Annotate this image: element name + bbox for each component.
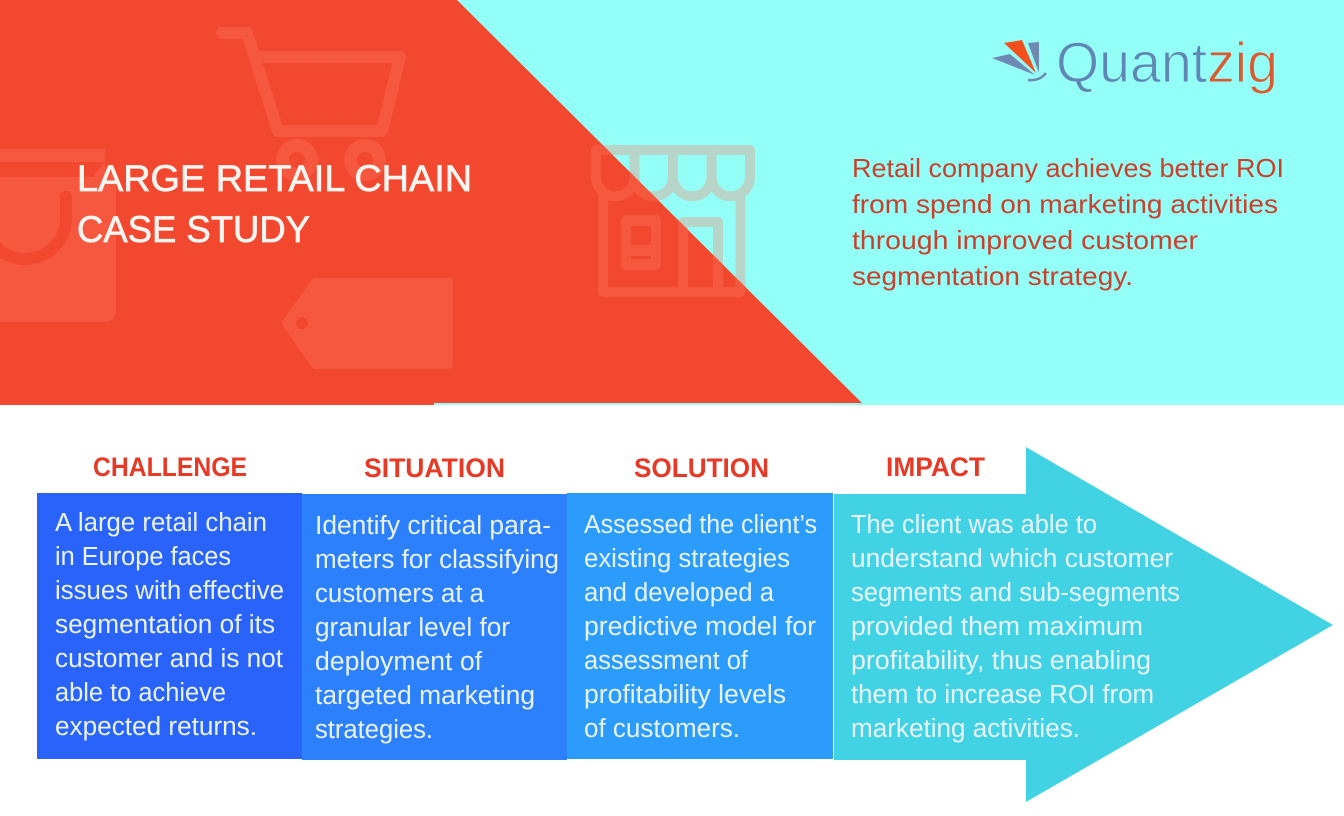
text block: solution: of customers. bbox=[584, 715, 740, 743]
icon: shopping bag bbox=[0, 149, 116, 322]
text block: impact: segments and sub-segments bbox=[851, 579, 1180, 607]
arrow: impact bbox=[834, 447, 1333, 802]
text block: situation: granular level for bbox=[315, 614, 511, 642]
text block: challenge: in Europe faces bbox=[55, 543, 231, 571]
text block: challenge: segmentation of its bbox=[55, 611, 275, 639]
text block: summary: segmentation strategy. bbox=[852, 261, 1133, 291]
text block: situation: strategies. bbox=[315, 716, 433, 744]
text block: solution bbox=[584, 511, 817, 743]
logo wordmark: Quantzig bbox=[1056, 31, 1278, 95]
text block: solution: assessment of bbox=[584, 647, 749, 675]
icon: shopping cart bbox=[222, 33, 400, 174]
text block: impact: profitability, thus enabling bbox=[851, 647, 1151, 675]
text block: situation bbox=[315, 512, 559, 744]
icon: logo fan bbox=[992, 40, 1046, 80]
text block: situation: customers at a bbox=[315, 580, 485, 608]
text block: impact: provided them maximum bbox=[851, 613, 1143, 641]
text block: solution: profitability levels bbox=[584, 681, 786, 709]
text block: situation: deployment of bbox=[315, 648, 483, 676]
text block: solution: Assessed the client’s bbox=[584, 511, 817, 539]
text block: impact bbox=[851, 511, 1180, 743]
heading: situation: SITUATION bbox=[364, 453, 505, 483]
text block: solution: predictive model for bbox=[584, 613, 817, 641]
text block: summary: from spend on marketing activities bbox=[852, 189, 1278, 219]
title: CASE STUDY bbox=[77, 209, 310, 250]
logo: Quantzig bbox=[992, 31, 1278, 95]
text block: summary: through improved customer bbox=[852, 225, 1198, 255]
panel: challenge bbox=[37, 452, 302, 759]
panel: situation bbox=[302, 453, 567, 760]
heading: impact: IMPACT bbox=[886, 452, 985, 482]
text block: impact: them to increase ROI from bbox=[851, 681, 1154, 709]
panel: impact arrow bbox=[834, 447, 1333, 802]
text block: situation: Identify critical para- bbox=[315, 512, 551, 540]
box: solution bbox=[567, 493, 833, 759]
icon: price tag bbox=[282, 278, 453, 369]
text block: challenge: issues with effective bbox=[55, 577, 284, 605]
text block: challenge: A large retail chain bbox=[55, 509, 267, 537]
text block: situation: meters for classifying bbox=[315, 546, 559, 574]
text block: summary bbox=[852, 153, 1284, 291]
text block: impact: understand which customer bbox=[851, 545, 1174, 573]
text block: challenge: expected returns. bbox=[55, 713, 257, 741]
icon: storefront on red bbox=[596, 150, 750, 292]
heading: solution: SOLUTION bbox=[634, 453, 769, 483]
panel: solution bbox=[567, 453, 833, 759]
box: situation bbox=[302, 494, 567, 760]
title: LARGE RETAIL CHAIN bbox=[77, 158, 472, 199]
icon: storefront on cyan bbox=[596, 150, 750, 292]
text block: situation: targeted marketing bbox=[315, 682, 535, 710]
panel: red triangle bbox=[0, 0, 862, 405]
text block: impact: The client was able to bbox=[851, 511, 1097, 539]
text block: solution: existing strategies bbox=[584, 545, 790, 573]
panel: header background bbox=[0, 0, 1344, 405]
text block: summary: Retail company achieves better ROI bbox=[852, 153, 1284, 183]
text block: challenge bbox=[55, 509, 284, 741]
text block: challenge: customer and is not bbox=[55, 645, 283, 673]
text block: impact: marketing activities. bbox=[851, 715, 1080, 743]
box: challenge bbox=[37, 493, 302, 759]
heading: challenge: CHALLENGE bbox=[93, 452, 247, 482]
title bbox=[77, 158, 472, 250]
text block: solution: and developed a bbox=[584, 579, 775, 607]
text block: challenge: able to achieve bbox=[55, 679, 226, 707]
